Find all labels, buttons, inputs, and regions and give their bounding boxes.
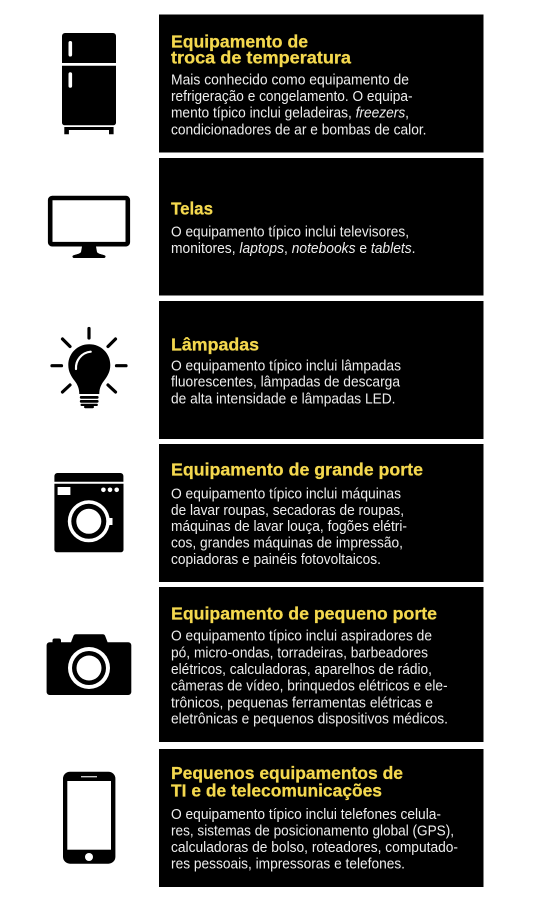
heading: grande porte: Equipamento de grande porte xyxy=(171,460,423,480)
text: TI e telecomunicacoes: calculadoras de bolso, roteadores, computado- xyxy=(171,840,458,856)
text: pequeno porte: pó, micro-ondas, torradeiras, barbeadores xyxy=(171,646,428,662)
heading: lampadas: Lâmpadas xyxy=(171,334,259,354)
heading: TI e telecomunicacoes: Pequenos equipamentos de xyxy=(171,763,403,783)
text: grande porte xyxy=(171,486,407,568)
text: pequeno porte: elétricos, calculadoras, aparelhos de rádio, xyxy=(171,662,432,678)
heading: TI e telecomunicacoes: TI e de telecomunicações xyxy=(171,781,382,801)
icon: fridge xyxy=(62,33,116,134)
text: grande porte: O equipamento típico inclui máquinas xyxy=(171,486,401,502)
panel: equipamento de grande porte xyxy=(159,444,484,582)
text: lampadas xyxy=(171,358,401,408)
text: grande porte: de lavar roupas, secadoras de roupas, xyxy=(171,503,404,519)
text: grande porte: máquinas de lavar louça, fogões elétri- xyxy=(171,519,407,535)
text: pequeno porte: trônicos, pequenas ferramentas elétricas e xyxy=(171,695,433,711)
text: troca de temperatura: Mais conhecido como equipamento de xyxy=(171,73,409,89)
icon: smartphone xyxy=(63,772,115,864)
text: TI e telecomunicacoes: O equipamento típico inclui telefones celula- xyxy=(171,807,441,823)
heading: troca de temperatura: troca de temperatura xyxy=(171,48,351,68)
icon: monitor xyxy=(50,198,128,258)
heading: troca de temperatura: Equipamento de xyxy=(171,32,308,52)
text: TI e telecomunicacoes: res pessoais, impressoras e telefones. xyxy=(171,857,405,873)
text: lampadas: O equipamento típico inclui lâmpadas xyxy=(171,358,401,374)
text: pequeno porte: eletrônicas e pequenos dispositivos médicos. xyxy=(171,712,448,728)
icon: washing machine xyxy=(54,473,124,552)
text: troca de temperatura: mento típico inclui geladeiras, freezers, xyxy=(171,106,409,122)
text: grande porte: copiadoras e painéis fotovoltaicos. xyxy=(171,552,381,568)
text: grande porte: cos, grandes máquinas de impressão, xyxy=(171,536,403,552)
heading: telas: Telas xyxy=(171,198,213,218)
panel: lampadas xyxy=(159,301,484,439)
text: troca de temperatura xyxy=(171,73,426,138)
icon: light bulb xyxy=(52,328,126,408)
text: telas: O equipamento típico inclui televisores, xyxy=(171,224,409,240)
panel: equipamento de troca de temperatura xyxy=(159,14,484,152)
heading: pequeno porte: Equipamento de pequeno porte xyxy=(171,603,437,623)
text: TI e telecomunicacoes xyxy=(171,807,458,873)
text: lampadas: fluorescentes, lâmpadas de descarga xyxy=(171,375,400,391)
icon: camera xyxy=(47,634,131,695)
text: troca de temperatura: refrigeração e congelamento. O equipa- xyxy=(171,89,413,105)
text: pequeno porte: câmeras de vídeo, brinquedos elétricos e ele- xyxy=(171,679,448,695)
panel: pequenos equipamentos de TI xyxy=(159,749,484,887)
text: pequeno porte: O equipamento típico inclui aspiradores de xyxy=(171,629,432,645)
text: troca de temperatura: condicionadores de ar e bombas de calor. xyxy=(171,122,426,138)
text: telas: monitores, laptops, notebooks e tablets. xyxy=(171,241,416,257)
text: lampadas: de alta intensidade e lâmpadas LED. xyxy=(171,392,396,408)
panel: equipamento de pequeno porte xyxy=(159,587,484,742)
text: telas xyxy=(171,224,416,257)
text: pequeno porte xyxy=(171,629,448,728)
panel: telas xyxy=(159,158,484,296)
text: TI e telecomunicacoes: res, sistemas de posicionamento global (GPS), xyxy=(171,824,454,840)
